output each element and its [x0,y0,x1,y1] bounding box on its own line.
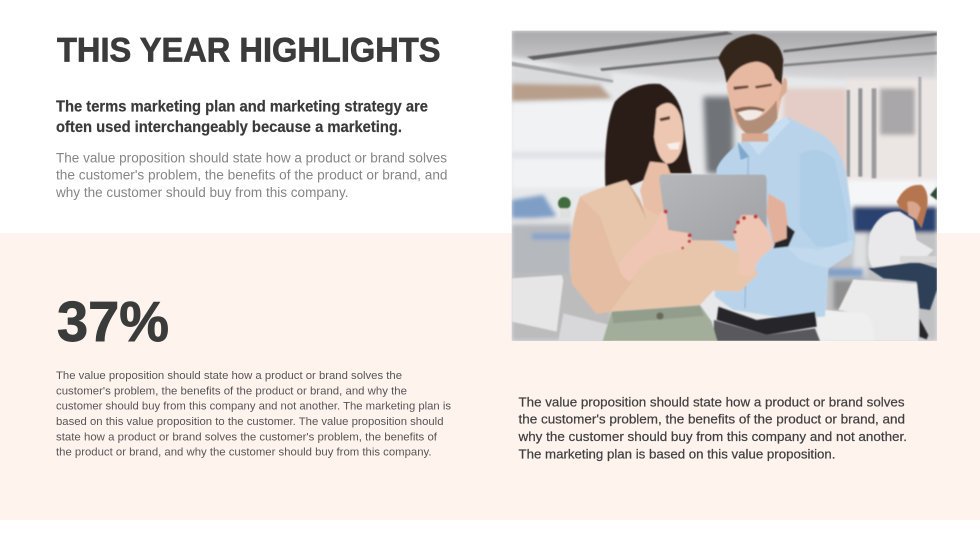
intro text: The value proposition should state how a product or brand solves [56,150,447,165]
right paragraph: The marketing plan is based on this value proposition. [518,446,836,461]
left paragraph: based on this value proposition to the customer. The value proposition should [56,416,444,428]
background chairs [512,275,563,332]
woman: hair [605,84,692,190]
woman: face and neck [654,103,683,164]
big statistic: 37% [57,290,169,354]
woman: blouse [570,180,758,314]
dark blurred column behind the couple [703,97,733,173]
left paragraph: the product or brand, and why the customer should buy from this company. [56,447,432,459]
intro text: why the customer should buy from this company. [55,185,348,200]
background band [0,233,980,520]
man: shirt [713,117,855,318]
woman: right hand [733,215,773,277]
left paragraph [56,370,452,459]
icon: background plant [558,197,571,210]
subheading: often used interchangeably because a marketing. [56,119,402,136]
right paragraph [517,394,907,461]
right paragraph: the customer's problem, the benefits of the product or brand, and [518,412,905,427]
left paragraph: The value proposition should state how a product or brand solves the [56,370,402,382]
left paragraph: state how a product or brand solves the customer's problem, the benefits of [56,431,438,443]
title: THIS YEAR HIGHLIGHTS [57,32,440,70]
man: raised hand and watch [767,193,788,244]
man: belt and trousers [717,307,817,335]
left paragraph: customer's problem, the benefits of the product or brand, and why the [56,385,407,397]
subheading: The terms marketing plan and marketing strategy are [56,99,428,116]
woman: left hand and forearm [618,210,692,282]
background seated woman [868,212,933,268]
intro text: the customer's problem, the benefits of the product or brand, and [56,168,447,183]
intro text [55,150,447,200]
left paragraph: customer should buy from this company and not another. The marketing plan is [56,401,452,413]
right paragraph: why the customer should buy from this company and not another. [517,429,907,444]
photo: two colleagues with a tablet in an office [512,31,937,341]
tablet [659,174,767,241]
right paragraph: The value proposition should state how a product or brand solves [518,394,905,409]
red nails [664,210,758,249]
woman: trousers [603,305,717,341]
subheading [56,99,428,136]
man: head [727,60,783,135]
